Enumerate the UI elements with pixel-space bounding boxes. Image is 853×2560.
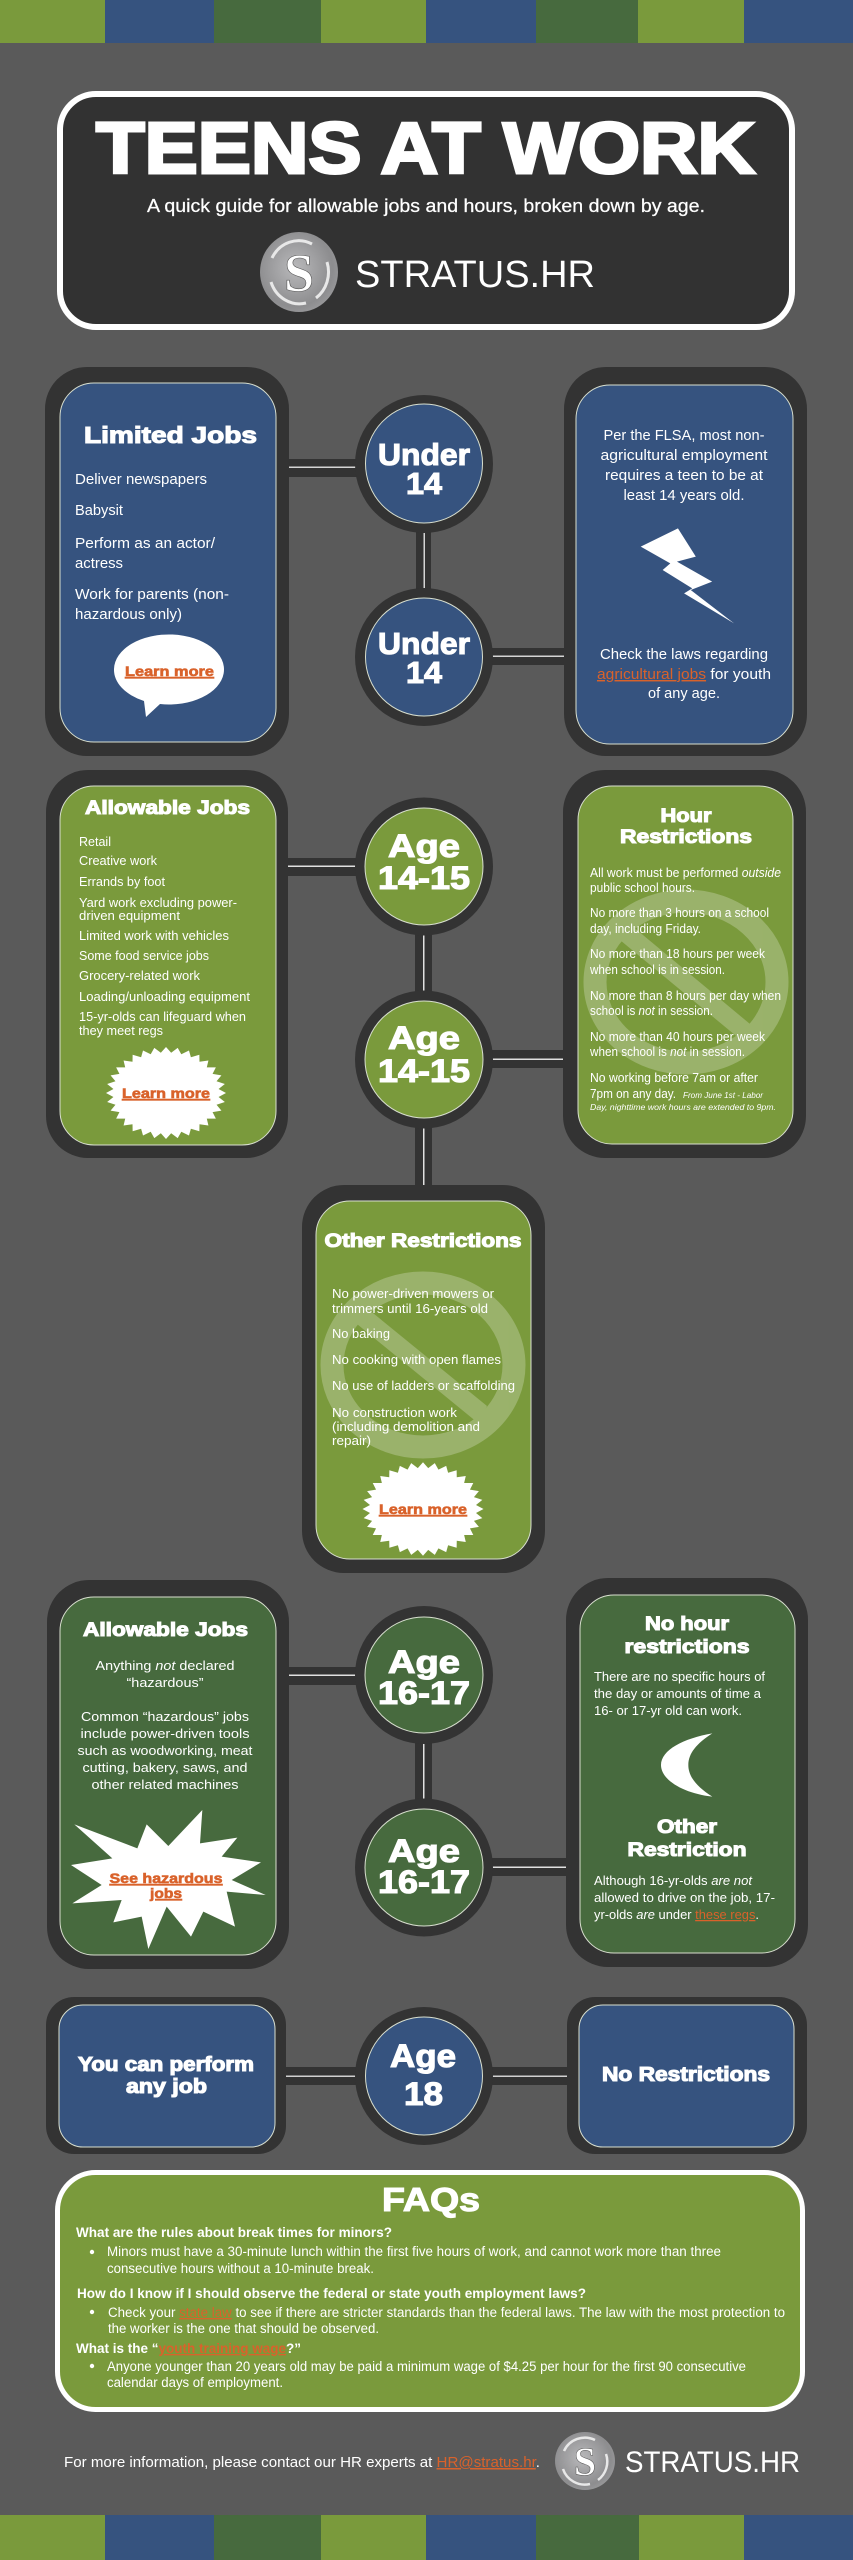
section: under 14 (45, 367, 807, 756)
job list: 15-yr-olds can lifeguard when (79, 1009, 246, 1024)
heading: other restriction (628, 1816, 746, 1861)
circle: age 14-15 (top): Age (388, 828, 460, 864)
icon: speech bubble with learn more link (114, 634, 224, 717)
panel: any job: any job (126, 2076, 207, 2098)
FLSA text (600, 428, 768, 504)
FLSA text: agricultural employment (600, 448, 768, 464)
panel: limited jobs (45, 367, 289, 756)
other restriction text: allowed to drive on the job, 17- (594, 1891, 775, 1905)
job list: Deliver newspapers (75, 472, 207, 488)
question 1: Minors must have a 30-minute lunch within the first five hours of work, and cannot work more than three (107, 2244, 721, 2259)
restrictions list: repair) (332, 1433, 371, 1448)
circle: age 16-17 (bottom) (355, 1798, 493, 1936)
question 1: consecutive hours without a 10-minute break. (107, 2261, 374, 2276)
icon: starburst with learn more link (106, 1047, 226, 1139)
job list (75, 472, 229, 623)
icon: explosion shape with hazardous jobs link (71, 1810, 266, 1949)
heading: other restriction: Restriction (628, 1839, 746, 1861)
restrictions list: trimmers until 16-years old (332, 1301, 488, 1316)
heading: FAQs: FAQs (382, 2181, 480, 2218)
agricultural jobs text: of any age. (648, 686, 720, 702)
job list: hazardous only) (75, 607, 182, 623)
panel: FLSA note (564, 367, 807, 756)
hazardous description (78, 1659, 253, 1792)
panel: no restrictions: No Restrictions (602, 2064, 770, 2086)
no hour restrictions text: 16- or 17-yr old can work. (594, 1704, 742, 1718)
job list: Babysit (75, 503, 123, 519)
job list: they meet regs (79, 1023, 163, 1038)
heading: other restriction: Other (657, 1816, 717, 1838)
job list: Limited work with vehicles (79, 928, 229, 943)
hour rules list: All work must be performed outside (590, 866, 781, 880)
heading: limited jobs: Limited Jobs (84, 422, 257, 448)
job list: Retail (79, 834, 111, 849)
job list: Some food service jobs (79, 948, 209, 963)
FLSA text: least 14 years old. (624, 488, 744, 504)
panel: hour restrictions (563, 770, 806, 1158)
hour rules list (589, 866, 781, 1112)
hour rules list: when school is not in session. (589, 1045, 745, 1059)
hazardous description: such as woodworking, meat (78, 1744, 253, 1758)
job list: Work for parents (non- (75, 587, 229, 603)
heading: Allowable Jobs (85, 797, 250, 819)
question 2 (77, 2286, 785, 2336)
heading (620, 805, 752, 848)
circle: under 14 (bottom): 14 (406, 655, 443, 690)
hour rules list: public school hours. (590, 881, 695, 895)
heading: Hour (660, 805, 712, 827)
panel: allowable jobs 14-15 (46, 770, 288, 1158)
icon: starburst with learn more link (362, 1462, 484, 1556)
question 3: What is the “youth training wage?” (76, 2341, 301, 2356)
heading: Restrictions (620, 826, 752, 848)
job list: Creative work (79, 853, 158, 868)
icon: explosion shape with hazardous jobs link: jobs (149, 1885, 182, 1901)
section: age 18 (46, 1997, 807, 2154)
panel: any job (46, 1997, 286, 2154)
hour rules list: Day, nighttime work hours are extended to 9pm. (590, 1102, 776, 1112)
bottom colour stripe band (0, 2515, 853, 2560)
circle: age 18: 18 (404, 2076, 443, 2112)
icon: explosion shape with hazardous jobs link: See hazardous (110, 1870, 223, 1886)
icon: crescent moon (661, 1733, 712, 1797)
title: TEENS AT WORK (96, 109, 755, 189)
hour rules list: school is not in session. (590, 1004, 713, 1018)
connectors (276, 459, 576, 665)
footer logo: S (574, 2439, 596, 2484)
question 2: Check your state law to see if there are stricter standards than the federal laws. The law with the most protection to (108, 2305, 785, 2320)
hour rules list: No more than 3 hours on a school (590, 906, 769, 920)
job list: Loading/unloading equipment (79, 989, 250, 1004)
heading: no hour restrictions: No hour (645, 1613, 729, 1635)
other restriction text (594, 1874, 775, 1922)
footer contact text: For more information, please contact our HR experts at HR@stratus.hr. (64, 2454, 540, 2471)
no hour restrictions text (594, 1670, 766, 1718)
job list: driven equipment (79, 908, 180, 923)
section: age 16-17 (47, 1578, 808, 1969)
heading: Other Restrictions (324, 1230, 522, 1252)
connectors (276, 1667, 580, 1876)
question 3: calendar days of employment. (107, 2375, 283, 2390)
logo: Stratus.HR: S (284, 243, 314, 303)
icon: lightning bolt (641, 528, 734, 623)
question 1: What are the rules about break times for minors? (76, 2225, 392, 2240)
circle: under 14 (top): Under (378, 437, 470, 472)
restrictions list (332, 1286, 515, 1448)
restrictions list: (including demolition and (332, 1419, 480, 1434)
restrictions list: No baking (332, 1326, 390, 1341)
hazardous description: Anything not declared (96, 1659, 235, 1673)
icon: starburst with learn more link: Learn more (379, 1501, 467, 1517)
restrictions list: No cooking with open flames (332, 1352, 501, 1367)
icon: prohibition sign watermark (332, 1283, 514, 1447)
agricultural jobs text (597, 647, 771, 702)
hour rules list: No working before 7am or after (590, 1071, 758, 1085)
panel: other restrictions 14-15 (302, 1185, 545, 1573)
agricultural jobs text: agricultural jobs for youth (597, 667, 771, 683)
circle: age 18 (355, 2007, 493, 2145)
question 3 (76, 2341, 746, 2390)
circle: age 14-15 (top): 14-15 (378, 860, 470, 896)
hazardous description: “hazardous” (126, 1676, 204, 1690)
question 2: How do I know if I should observe the federal or state youth employment laws? (77, 2286, 586, 2301)
job list: actress (75, 556, 123, 572)
subtitle: A quick guide for allowable jobs and hours, broken down by age. (147, 195, 705, 216)
circle: under 14 (bottom) (355, 588, 493, 726)
header panel (60, 94, 792, 327)
circle: age 16-17 (top) (355, 1606, 493, 1744)
question 3: Anyone younger than 20 years old may be paid a minimum wage of $4.25 per hour for the first 90 consecutive (107, 2359, 746, 2374)
restrictions list: No power-driven mowers or (332, 1286, 495, 1301)
job list: Yard work excluding power- (79, 895, 237, 910)
hour rules list: No more than 8 hours per day when (590, 989, 781, 1003)
circle: age 14-15 (bottom) (355, 990, 493, 1128)
panel: any job: You can perform (78, 2054, 254, 2076)
agricultural jobs text: Check the laws regarding (600, 647, 768, 663)
circle: age 14-15 (bottom): 14-15 (378, 1053, 470, 1089)
circle: age 16-17 (top): 16-17 (378, 1675, 470, 1711)
FLSA text: Per the FLSA, most non- (604, 428, 765, 444)
panel: no restrictions (567, 1997, 807, 2154)
panel: FAQs (58, 2172, 802, 2410)
heading: no hour restrictions (624, 1613, 750, 1658)
hour rules list: From June 1st - Labor (683, 1090, 764, 1100)
footer logo: STRATUS.HR (625, 2446, 800, 2479)
circle: under 14 (top) (355, 395, 493, 533)
connectors (276, 858, 578, 1201)
question 1 (76, 2225, 721, 2276)
circle: under 14 (bottom): Under (378, 626, 470, 661)
circle: age 16-17 (bottom): 16-17 (378, 1864, 470, 1900)
hour rules list: No more than 18 hours per week (590, 947, 766, 961)
connectors (275, 2067, 579, 2085)
logo: Stratus.HR: STRATUS.HR (355, 254, 595, 296)
job list: Errands by foot (79, 874, 165, 889)
hour rules list: No more than 40 hours per week (590, 1030, 766, 1044)
panel: no hour restrictions (566, 1578, 808, 1967)
no hour restrictions text: the day or amounts of time a (594, 1687, 761, 1701)
hour rules list: 7pm on any day. (590, 1087, 676, 1101)
circle: under 14 (top): 14 (406, 466, 443, 501)
FLSA text: requires a teen to be at (605, 468, 763, 484)
other restriction text: Although 16-yr-olds are not (594, 1874, 753, 1888)
hazardous description: cutting, bakery, saws, and (82, 1761, 248, 1775)
panel: allowable jobs 16-17 (47, 1580, 289, 1969)
section: age 14-15 (46, 770, 806, 1201)
restrictions list: No construction work (332, 1405, 458, 1420)
job list (79, 834, 250, 1038)
circle: age 18: Age (390, 2038, 456, 2074)
hour rules list: when school is in session. (589, 963, 725, 977)
hazardous description: other related machines (92, 1778, 238, 1792)
footer logo (555, 2432, 800, 2490)
circle: age 16-17 (top): Age (388, 1644, 460, 1680)
no hour restrictions text: There are no specific hours of (594, 1670, 766, 1684)
circle: age 14-15 (top) (355, 798, 493, 936)
job list: Grocery-related work (79, 968, 201, 983)
hazardous description: include power-driven tools (80, 1727, 250, 1741)
icon: speech bubble with learn more link: Learn more (125, 663, 214, 679)
hour rules list: day, including Friday. (590, 922, 701, 936)
icon: starburst with learn more link: Learn more (122, 1085, 210, 1101)
heading: Allowable Jobs (83, 1619, 248, 1641)
logo: Stratus.HR (260, 232, 595, 312)
circle: age 16-17 (bottom): Age (388, 1833, 460, 1869)
circle: age 14-15 (bottom): Age (388, 1020, 460, 1056)
job list: Perform as an actor/ (75, 536, 216, 552)
icon: prohibition sign watermark (595, 901, 777, 1063)
restrictions list: No use of ladders or scaffolding (332, 1378, 515, 1393)
top colour stripe band (0, 0, 853, 43)
question 2: the worker is the one that should be observed. (108, 2321, 379, 2336)
hazardous description: Common “hazardous” jobs (81, 1710, 249, 1724)
heading: no hour restrictions: restrictions (624, 1636, 750, 1658)
other restriction text: yr-olds are under these regs. (594, 1908, 759, 1922)
